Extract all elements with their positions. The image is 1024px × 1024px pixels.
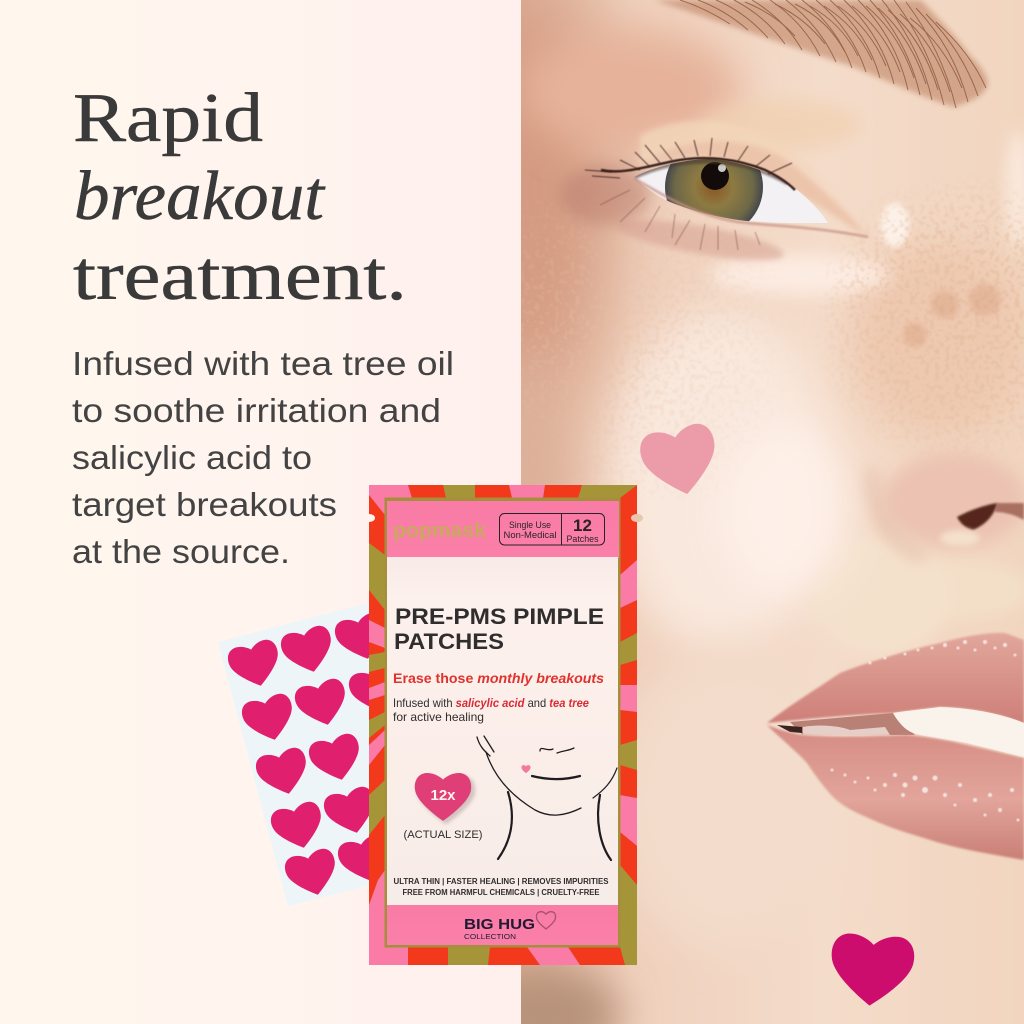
big hug collection logo: BIG HUG — [464, 916, 535, 933]
badge: single use, 12 patches: 12 — [573, 516, 592, 535]
pouch top pink band — [387, 501, 619, 558]
icon: 12x actual size heart: 12x — [430, 787, 456, 804]
benefits list — [394, 877, 609, 897]
body text — [72, 345, 454, 570]
ingredients text — [393, 696, 589, 724]
body text: salicylic acid to — [72, 439, 312, 476]
title — [73, 80, 407, 315]
body text: at the source. — [72, 533, 290, 570]
icon: 12x actual size heart — [415, 773, 475, 824]
badge: single use, 12 patches: Patches — [566, 534, 599, 545]
benefits list: ULTRA THIN | FASTER HEALING | REMOVES IMPURITIES — [394, 877, 609, 886]
icon: magenta heart — [828, 932, 916, 1008]
pouch white panel — [387, 557, 618, 905]
lips — [767, 633, 1024, 860]
body text: Infused with tea tree oil — [72, 345, 454, 382]
background panel — [0, 0, 521, 1024]
icon: small heart on chin — [521, 765, 531, 773]
big hug collection logo: COLLECTION — [464, 932, 516, 941]
product title — [394, 604, 604, 654]
skin shading — [465, 0, 1024, 1024]
big hug collection logo — [464, 912, 556, 941]
product title: PRE-PMS PIMPLE — [395, 604, 604, 629]
face line drawing — [477, 736, 617, 860]
body text: target breakouts — [72, 486, 337, 523]
product pouch — [363, 485, 643, 965]
product title: PATCHES — [394, 629, 504, 654]
patch sheet with hearts — [218, 603, 369, 906]
icon: pale pink heart — [640, 424, 714, 494]
body text: to soothe irritation and — [72, 392, 441, 429]
tear notches — [363, 514, 643, 522]
pouch bottom pink band — [387, 905, 618, 945]
teeth — [893, 707, 1024, 758]
photo: close-up of face — [521, 0, 1024, 1024]
eye — [560, 121, 868, 269]
title: treatment. — [73, 238, 407, 315]
benefits list: FREE FROM HARMFUL CHEMICALS | CRUELTY-FREE — [402, 888, 600, 897]
red tagline: Erase those monthly breakouts — [393, 670, 604, 686]
title: Rapid — [73, 80, 263, 157]
pouch sunburst border — [369, 485, 637, 965]
badge: single use, 12 patches: Non-Medical — [504, 530, 556, 541]
nose and nostril — [872, 470, 1024, 558]
pouch inner frame — [384, 498, 620, 948]
badge: single use, 12 patches — [500, 514, 604, 545]
badge: single use, 12 patches: Single Use — [509, 520, 551, 531]
ingredients text: Infused with salicylic acid and tea tree — [393, 696, 589, 710]
ingredients text: for active healing — [393, 710, 484, 724]
title: breakout — [74, 158, 326, 235]
actual size caption: (ACTUAL SIZE) — [404, 829, 482, 841]
brand logo: popmask — [393, 520, 487, 542]
freckles — [536, 196, 1024, 462]
eyebrow — [654, 0, 988, 108]
